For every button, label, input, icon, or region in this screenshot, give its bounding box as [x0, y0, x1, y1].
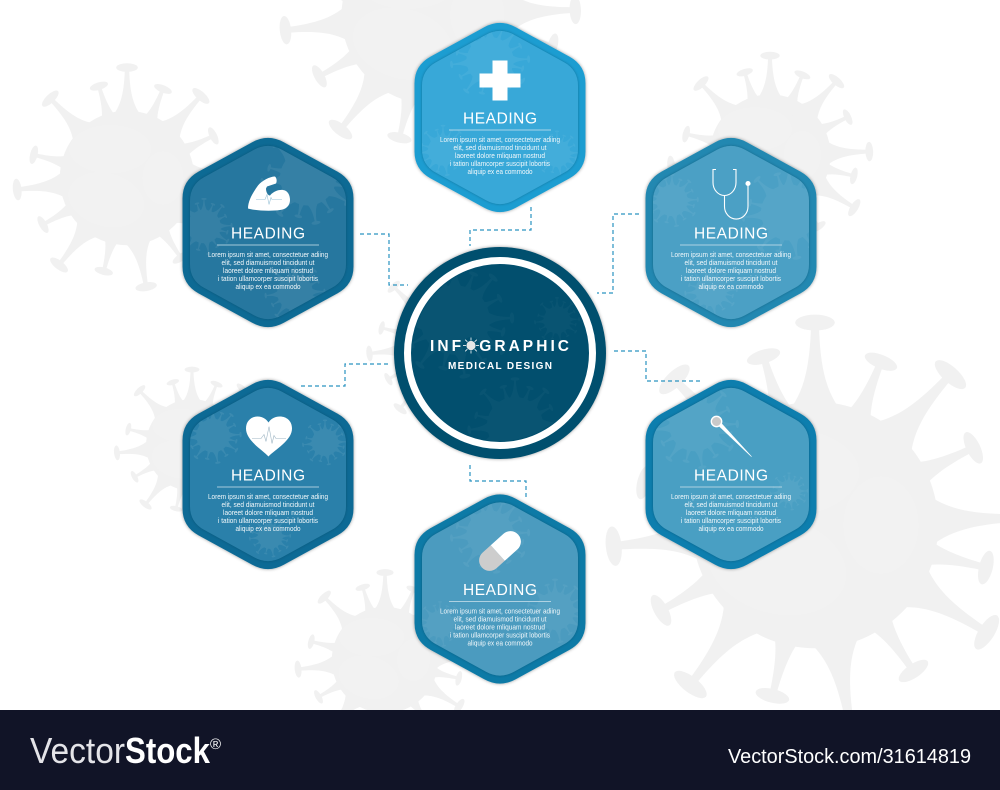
body text: laoreet dolore mliquam nostrud: [455, 151, 545, 160]
body text: aliquip ex ea commodo: [236, 524, 300, 533]
dashed connector: lower left: [300, 364, 388, 386]
body text: i tation ullamcorper suscipit lobortis: [681, 516, 781, 525]
panel: top hexagon: [414, 20, 586, 212]
footer bar: [0, 710, 1000, 790]
body text: aliquip ex ea commodo: [698, 524, 764, 533]
body text: Lorem ipsum sit amet, consectetuer adiing: [671, 492, 791, 501]
heading: HEADING: [694, 468, 768, 484]
body text: elit, sed diamuismod tincidunt ut: [222, 258, 314, 267]
body text: laoreet dolore mliquam nostrud: [223, 266, 313, 275]
icon: heart with pulse: [246, 416, 292, 456]
dashed connector: upper left: [360, 234, 408, 285]
heading: HEADING: [463, 582, 537, 599]
body text: elit, sed diamuismod tincidunt ut: [684, 258, 778, 267]
footer logo: Vector: [30, 730, 125, 771]
body text: i tation ullamcorper suscipit lobortis: [681, 274, 781, 283]
body text: i tation ullamcorper suscipit lobortis: [450, 630, 550, 640]
body text: aliquip ex ea commodo: [698, 282, 764, 291]
panel: upper right hexagon: [645, 138, 837, 327]
footer logo: Stock: [125, 730, 211, 771]
icon: flexed arm: [248, 176, 290, 211]
dashed connector: bottom: [470, 465, 526, 497]
body text: [208, 250, 328, 291]
body text: elit, sed diamuismod tincidunt ut: [454, 143, 546, 152]
dashed connector: top: [470, 207, 531, 246]
icon: capsule pill: [475, 527, 525, 575]
heading: HEADING: [231, 468, 305, 484]
dashed connector: lower right: [614, 351, 702, 381]
icon: virus letter O: [462, 337, 480, 354]
icon: pin: [711, 416, 752, 457]
icon: stethoscope: [713, 170, 750, 219]
body text: laoreet dolore mliquam nostrud: [686, 266, 776, 275]
body text: elit, sed diamuismod tincidunt ut: [222, 500, 314, 509]
body text: aliquip ex ea commodo: [468, 638, 532, 648]
body text: i tation ullamcorper suscipit lobortis: [218, 274, 318, 283]
heading: HEADING: [231, 226, 305, 242]
body text: aliquip ex ea commodo: [236, 282, 300, 291]
body text: [671, 250, 791, 291]
subtitle: MEDICAL DESIGN: [448, 361, 552, 372]
icon: medical cross: [480, 60, 520, 100]
body text: Lorem ipsum sit amet, consectetuer adiing: [671, 250, 791, 259]
body text: [440, 135, 560, 176]
body text: elit, sed diamuismod tincidunt ut: [454, 614, 546, 624]
body text: Lorem ipsum sit amet, consectetuer adiing: [208, 250, 328, 259]
body text: [440, 606, 560, 648]
body text: Lorem ipsum sit amet, consectetuer adiing: [440, 606, 560, 616]
body text: i tation ullamcorper suscipit lobortis: [450, 159, 550, 168]
body text: laoreet dolore mliquam nostrud: [223, 508, 313, 517]
body text: Lorem ipsum sit amet, consectetuer adiing: [208, 492, 328, 501]
heading: HEADING: [694, 226, 768, 242]
body text: [208, 492, 328, 533]
body text: i tation ullamcorper suscipit lobortis: [218, 516, 318, 525]
body text: laoreet dolore mliquam nostrud: [455, 622, 545, 632]
title: INFOGRAPHIC: [430, 338, 569, 355]
panel: bottom hexagon: [414, 494, 588, 684]
heading: HEADING: [463, 110, 537, 128]
panel: lower left hexagon: [182, 380, 354, 569]
body text: aliquip ex ea commodo: [468, 167, 532, 176]
body text: laoreet dolore mliquam nostrud: [686, 508, 776, 517]
footer trademark: ®: [210, 736, 221, 753]
body text: Lorem ipsum sit amet, consectetuer adiing: [440, 135, 560, 144]
body text: elit, sed diamuismod tincidunt ut: [684, 500, 778, 509]
footer image id: VectorStock.com/31614819: [728, 746, 971, 768]
panel: lower right hexagon: [646, 380, 816, 569]
panel: upper left hexagon: [175, 130, 356, 327]
dashed connector: upper right: [597, 214, 639, 293]
body text: [671, 492, 791, 533]
panel: central circle: [394, 247, 606, 473]
